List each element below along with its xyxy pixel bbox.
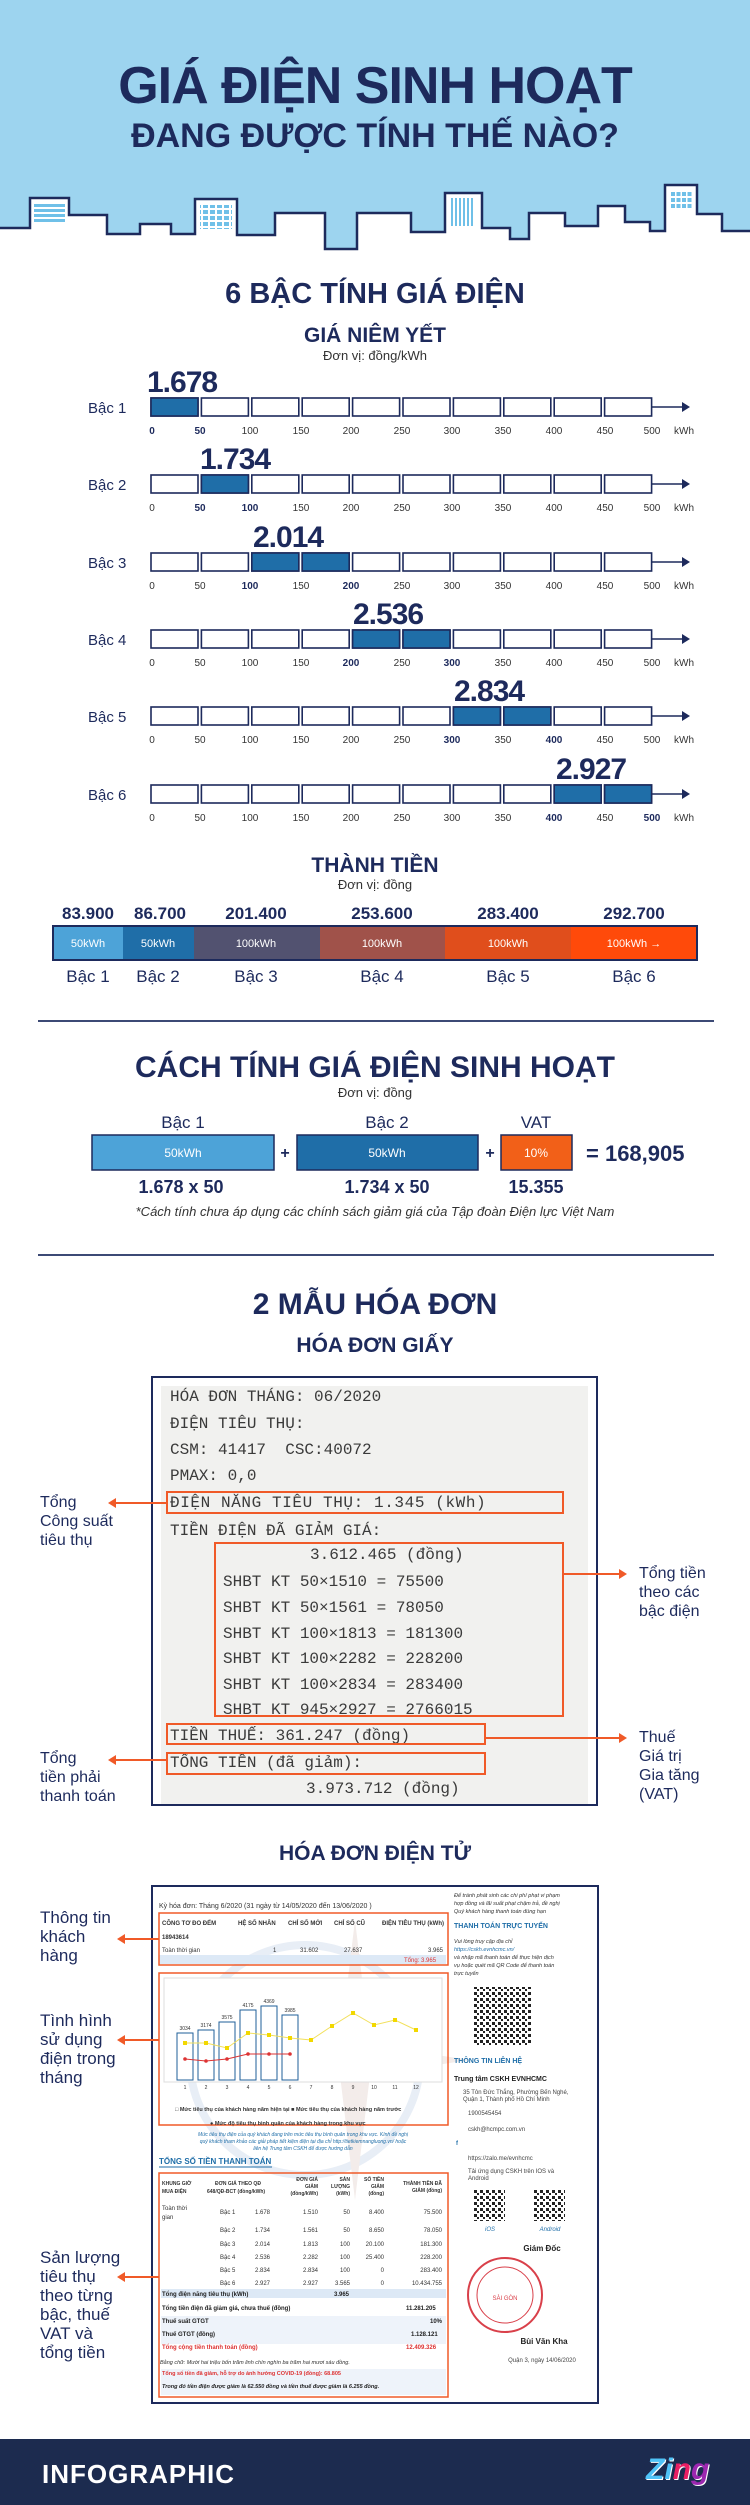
electronic bill: 2.536 — [255, 2255, 271, 2261]
customer info box — [159, 1919, 446, 1964]
calculation formula: + — [485, 1145, 495, 1162]
stacked cost bar: 83.900 — [62, 904, 114, 923]
calculation formula: = 168,905 — [586, 1141, 684, 1166]
electronic bill: 11.281.205 — [406, 2306, 436, 2312]
callout: thue VAT — [639, 1729, 699, 1803]
electronic bill: GIẢM (đồng) — [412, 2187, 442, 2194]
electronic bill: Bậc 3 — [220, 2242, 236, 2248]
electronic bill: 1.561 — [303, 2228, 319, 2234]
electronic bill: 8.650 — [369, 2228, 385, 2234]
electronic bill: Android — [539, 2227, 561, 2233]
stacked cost bar: 50kWh — [141, 938, 175, 950]
electronic bill: (kWh) — [336, 2191, 350, 2197]
row: bac 6 — [88, 753, 694, 824]
electronic bill: Giám Đốc — [523, 2244, 561, 2253]
electronic bill: 3.965 — [334, 2292, 350, 2298]
subheading: hoa don giay: HÓA ĐƠN GIẤY — [296, 1334, 454, 1357]
footnote: *Cách tính chưa áp dụng các chính sách giảm giá của Tập đoàn Điện lực Việt Nam — [136, 1204, 614, 1219]
electronic bill: 2.834 — [255, 2268, 271, 2274]
stacked cost bar: Bậc 5 — [486, 967, 530, 986]
right column contact: Để tránh phát sinh các chi phí phạt vi phạm — [454, 1892, 560, 1899]
electronic bill: SÀI GÒN — [492, 2295, 518, 2302]
paper bill: TIỀN THUẾ: 361.247 (đồng) — [170, 1727, 410, 1745]
electronic bill: Quận 1, Thành phố Hồ Chí Minh — [463, 2097, 550, 2103]
electronic bill: 12 — [413, 2085, 419, 2091]
electronic bill: Tổng điện năng tiêu thụ (kWh) — [162, 2291, 248, 2298]
zing logo: Zing — [646, 2453, 709, 2486]
stacked cost bar: 50kWh — [71, 938, 105, 950]
footer brand: INFOGRAPHIC — [42, 2459, 235, 2489]
electronic bill: Bậc 1 — [220, 2210, 236, 2216]
callout: tong tien thanh toan: Tổng — [40, 1750, 76, 1767]
unit note: Đơn vị: đồng/kWh — [323, 348, 427, 363]
callout: san luong: VAT và — [40, 2324, 93, 2343]
callout: thue VAT: Thuế — [639, 1729, 675, 1746]
row: bac 4: 200 — [343, 658, 360, 669]
row: bac 3: 2.014 — [253, 521, 324, 554]
row: bac 5: 400 — [546, 735, 563, 746]
electronic bill: 6 — [289, 2085, 292, 2091]
electronic bill: 181.300 — [420, 2242, 443, 2248]
customer info box: CHỈ SỐ MỚI — [288, 1919, 322, 1927]
unit note: Đơn vị: đồng — [338, 877, 412, 892]
electronic bill: 35 Tôn Đức Thắng, Phường Bến Nghé, — [463, 2089, 569, 2096]
unit note: Đơn vị: đồng — [338, 1085, 412, 1100]
customer info box: 27.637 — [344, 1948, 363, 1954]
electronic bill: 3034 — [179, 2026, 191, 2032]
row: bac 2 — [88, 443, 694, 514]
electronic bill: 100 — [340, 2255, 351, 2261]
calculation formula: Bậc 1 — [161, 1113, 205, 1132]
electronic bill: 5 — [268, 2085, 271, 2091]
electronic bill: 12.409.326 — [406, 2345, 437, 2351]
electronic bill: 10.434.755 — [412, 2281, 443, 2287]
callout: tong tien theo bac: theo các — [639, 1584, 699, 1601]
calculation formula: Bậc 2 — [365, 1113, 409, 1132]
paper bill: 3.973.712 (đồng) — [306, 1780, 460, 1798]
electronic bill: 8.400 — [369, 2210, 385, 2216]
row: bac 3 — [88, 521, 694, 592]
electronic bill: 10% — [430, 2319, 443, 2325]
paper bill: SHBT KT 100×2834 = 283400 — [223, 1676, 463, 1694]
electronic bill: 1.510 — [303, 2210, 319, 2216]
electronic bill: 4175 — [242, 2003, 254, 2009]
stacked cost bar: 86.700 — [134, 904, 186, 923]
calculation formula — [91, 1113, 684, 1197]
callout: thue VAT: Giá trị — [639, 1748, 682, 1765]
callout: san luong: bậc, thuế — [40, 2305, 110, 2324]
right column contact: Vui lòng truy cập địa chỉ — [454, 1938, 513, 1945]
highlight boxes on paper bill — [166, 1491, 564, 1775]
calculation formula: 10% — [524, 1146, 548, 1160]
callout: san luong: Sản lượng — [40, 2248, 120, 2267]
electronic bill: cskh@hcmpc.com.vn — [468, 2127, 525, 2133]
customer info box: CÔNG TƠ ĐO ĐẾM — [162, 1919, 216, 1927]
arrows for paper bill — [108, 1498, 627, 1765]
electronic bill: LƯỢNG — [331, 2184, 350, 2190]
electronic bill: 11 — [392, 2085, 398, 2091]
right column contact: https://cskh.evnhcmc.vn/ — [454, 1947, 515, 1953]
electronic bill: SỐ TIỀN — [364, 2176, 384, 2183]
callout: tong cong suat: tiêu thụ — [40, 1532, 92, 1549]
electronic bill: f — [456, 2141, 459, 2147]
electronic bill: Android — [468, 2176, 489, 2182]
paper bill: TIỀN ĐIỆN ĐÃ GIẢM GIÁ: — [170, 1522, 381, 1540]
callout: san luong: theo từng — [40, 2286, 113, 2305]
paper bill: PMAX: 0,0 — [170, 1467, 256, 1485]
row: bac 2: 50 — [194, 503, 206, 514]
callout: thong tin khach hang — [40, 1908, 111, 1965]
callout: tinh hinh su dung — [40, 2011, 116, 2087]
callout: tinh hinh su dung: tháng — [40, 2068, 83, 2087]
stacked cost bar: 100kWh — [362, 938, 402, 950]
row: bac 2: 100 — [242, 503, 259, 514]
right column contact — [454, 1892, 561, 1977]
electronic bill: Bằng chữ: Mười hai triệu bốn trăm linh chín nghìn ba trăm hai mươi sáu đồng. — [160, 2359, 350, 2366]
paper bill: ĐIỆN NĂNG TIÊU THỤ: 1.345 (kWh) — [170, 1494, 486, 1512]
row: bac 5: Bậc 5 — [88, 709, 126, 726]
customer info box: Toàn thời gian — [162, 1948, 200, 1954]
electronic bill: 283.400 — [420, 2268, 443, 2274]
electronic bill: 50 — [343, 2228, 351, 2234]
customer info box: ĐIỆN TIÊU THỤ (kWh) — [382, 1919, 444, 1927]
electronic bill: 0 — [381, 2281, 385, 2287]
stacked cost bar: 100kWh → — [607, 938, 661, 950]
electronic bill: 0 — [381, 2268, 385, 2274]
callout: tinh hinh su dung: sử dụng — [40, 2030, 102, 2049]
row: bac 5: 2.834 — [454, 675, 525, 708]
electronic bill: Mức tiêu thụ điện của quý khách đang trên mức tiêu thụ bình quân trong khu vực. Kính đề nghị — [198, 2131, 409, 2138]
paper bill: SHBT KT 50×1561 = 78050 — [223, 1599, 444, 1617]
callout: thue VAT: Gia tăng — [639, 1767, 699, 1784]
electronic bill: MUA ĐIỆN — [162, 2187, 187, 2195]
subtitle: ĐANG ĐƯỢC TÍNH THẾ NÀO? — [131, 117, 619, 155]
electronic bill: Trung tâm CSKH EVNHCMC — [454, 2076, 547, 2083]
electronic bill: Trong đó tiền điện được giảm là 62.550 đồng và tiền thuế được giảm là 6.255 đồng. — [162, 2383, 380, 2390]
electronic bill: SẢN — [339, 2176, 350, 2183]
callout: tong tien theo bac — [639, 1565, 706, 1620]
electronic bill: □ Mức tiêu thụ của khách hàng năm hiện tại ■ Mức tiêu thụ của khách hàng năm trước — [175, 2107, 401, 2113]
electronic bill: ĐƠN GIÁ — [296, 2176, 318, 2183]
customer info box: 3.965 — [428, 1948, 444, 1954]
customer info box: CHỈ SỐ CŨ — [334, 1920, 365, 1927]
electronic bill: 75.500 — [424, 2210, 443, 2216]
electronic bill: Tải ứng dụng CSKH trên IOS và — [468, 2169, 555, 2175]
customer info box: 18943614 — [162, 1935, 189, 1941]
row: bac 6: 500 — [644, 813, 661, 824]
electronic bill: Bậc 5 — [220, 2268, 236, 2274]
title: GIÁ ĐIỆN SINH HOẠT — [118, 57, 632, 115]
callout: tong cong suat: Tổng — [40, 1494, 76, 1511]
electronic bill: quý khách tham khảo các giải pháp tiết kiệm điện tại địa chỉ http://tietkiemnangluong.vn/ hoặc — [200, 2138, 407, 2145]
calculation formula: 15.355 — [508, 1177, 564, 1197]
electronic bill: 2.014 — [255, 2242, 271, 2248]
electronic bill: 2 — [205, 2085, 208, 2091]
stacked cost bar — [52, 904, 698, 986]
electronic bill: Bậc 4 — [220, 2255, 236, 2261]
electronic bill: Thuế GTGT (đồng) — [162, 2331, 215, 2338]
section heading: cach tinh: CÁCH TÍNH GIÁ ĐIỆN SINH HOẠT — [135, 1051, 615, 1084]
electronic bill: 3.565 — [335, 2281, 351, 2287]
electronic bill: 7 — [310, 2085, 313, 2091]
row: bac 4: 2.536 — [353, 598, 423, 631]
calculation formula: VAT — [521, 1113, 551, 1132]
electronic bill: 50 — [343, 2210, 351, 2216]
electronic bill: 8 — [331, 2085, 334, 2091]
electronic bill: 2.282 — [303, 2255, 319, 2261]
electronic bill: THÀNH TIỀN ĐÃ — [403, 2180, 442, 2187]
electronic bill: 100 — [340, 2242, 351, 2248]
paper bill: ĐIỆN TIÊU THỤ: — [170, 1415, 304, 1433]
electronic bill: 1.734 — [255, 2228, 271, 2234]
electronic bill: 1.678 — [255, 2210, 271, 2216]
electronic bill: https://zalo.me/evnhcmc — [468, 2156, 533, 2162]
section heading: 2 mau hoa don: 2 MẪU HÓA ĐƠN — [253, 1288, 497, 1321]
stacked cost bar: Bậc 2 — [136, 967, 180, 986]
subheading: hoa don dien tu: HÓA ĐƠN ĐIỆN TỬ — [279, 1842, 471, 1865]
callout: thong tin khach hang: Thông tin — [40, 1908, 111, 1927]
row: bac 6: Bậc 6 — [88, 787, 126, 804]
callout: tong cong suat — [40, 1494, 113, 1549]
electronic bill: 2.927 — [303, 2281, 319, 2287]
paper bill: TỔNG TIỀN (đã giảm): — [170, 1754, 362, 1772]
right column contact: vụ hoặc quét mã QR Code để thanh toán — [454, 1962, 554, 1969]
electronic bill: 1 — [184, 2085, 187, 2091]
calculation formula: 50kWh — [164, 1146, 202, 1160]
electronic bill: Toàn thời — [162, 2206, 187, 2212]
electronic bill: 3575 — [221, 2015, 233, 2021]
electronic bill: 4 — [247, 2085, 250, 2091]
electronic bill: Bùi Văn Kha — [520, 2337, 568, 2346]
electronic bill: GIẢM — [305, 2183, 318, 2190]
calculation formula: 1.734 x 50 — [344, 1177, 430, 1197]
callout: tong tien theo bac: Tổng tiền — [639, 1565, 706, 1582]
callout: san luong: tiêu thụ — [40, 2267, 96, 2286]
electronic bill: iOS — [485, 2227, 495, 2233]
right column contact: và nhập mã thanh toán để thực hiện dịch — [454, 1954, 554, 1961]
electronic bill: 228.200 — [420, 2255, 443, 2261]
electronic bill: 3985 — [284, 2008, 296, 2014]
right column contact: hợp đồng và lãi suất phạt chậm trả, đề nghị — [454, 1900, 561, 1907]
right column contact: Quý khách hàng thanh toán đúng hạn — [454, 1909, 546, 1915]
callout: san luong: tổng tiền — [40, 2343, 105, 2362]
electronic bill: Tổng số tiền đã giảm, hỗ trợ do ảnh hưởng COVID-19 (đồng): 68.805 — [162, 2370, 341, 2377]
customer info box: HỆ SỐ NHÂN — [238, 1919, 276, 1927]
row: bac 2: Bậc 2 — [88, 477, 126, 494]
stacked cost bar: 253.600 — [351, 904, 413, 923]
electronic bill: 25.400 — [366, 2255, 385, 2261]
row: bac 3: Bậc 3 — [88, 555, 126, 572]
footer — [0, 2439, 750, 2505]
row: bac 2: 1.734 — [200, 443, 271, 476]
row: bac 4: Bậc 4 — [88, 632, 126, 649]
electronic bill: 100 — [340, 2268, 351, 2274]
calculation formula: + — [280, 1145, 290, 1162]
electronic bill: Quận 3, ngày 14/06/2020 — [508, 2358, 577, 2364]
electronic bill: 648/QĐ-BCT (đồng/kWh) — [207, 2189, 265, 2195]
electronic bill: 3 — [226, 2085, 229, 2091]
electronic bill: Kỳ hóa đơn: Tháng 6/2020 (31 ngày từ 14/05/2020 đến 13/06/2020 ) — [159, 1901, 372, 1910]
stacked cost bar: 201.400 — [225, 904, 287, 923]
stacked cost bar: Bậc 1 — [66, 967, 110, 986]
callout: tong tien thanh toan: thanh toán — [40, 1788, 116, 1805]
electronic bill: THANH TOÁN TRỰC TUYẾN — [454, 1920, 548, 1930]
customer info box: 1 — [273, 1948, 277, 1954]
electronic bill: Bậc 6 — [220, 2281, 236, 2287]
row: bac 1: 0 — [149, 426, 155, 437]
paper bill — [151, 1376, 598, 1806]
electronic bill: 20.100 — [366, 2242, 385, 2248]
callout: tinh hinh su dung: Tình hình — [40, 2011, 112, 2030]
row: bac 3: 100 — [242, 581, 259, 592]
callout: tong cong suat: Công suất — [40, 1513, 113, 1530]
callout: tong tien theo bac: bậc điện — [639, 1603, 700, 1620]
row: bac 4: 300 — [444, 658, 461, 669]
usage chart — [159, 1973, 448, 2125]
electronic bill: 9 — [352, 2085, 355, 2091]
electronic bill: Bậc 2 — [220, 2228, 236, 2234]
paper bill: CSM: 41417 CSC:40072 — [170, 1441, 372, 1459]
row: bac 3: 200 — [343, 581, 360, 592]
subheading: gia niem yet: GIÁ NIÊM YẾT — [304, 324, 446, 347]
customer info box: Tổng: 3.965 — [404, 1957, 437, 1964]
paper bill: SHBT KT 100×2282 = 228200 — [223, 1650, 463, 1668]
stacked cost bar: Bậc 4 — [360, 967, 404, 986]
electronic bill: ĐƠN GIÁ THEO QĐ — [215, 2180, 261, 2187]
callout: tong tien thanh toan — [40, 1750, 116, 1805]
row: bac 1: 1.678 — [147, 366, 217, 399]
electronic bill: 1.813 — [303, 2242, 319, 2248]
electronic bill: 3174 — [200, 2023, 212, 2029]
callout: tinh hinh su dung: điện trong — [40, 2049, 116, 2068]
right column contact: trực tuyến — [454, 1970, 479, 1977]
electronic bill: GIẢM — [371, 2183, 384, 2190]
electronic bill: (đồng) — [368, 2191, 384, 2197]
paper bill: SHBT KT 100×1813 = 181300 — [223, 1625, 463, 1643]
row: bac 5: 300 — [444, 735, 461, 746]
callout: san luong — [40, 2248, 120, 2362]
section heading: 6 bac: 6 BẬC TÍNH GIÁ ĐIỆN — [225, 278, 525, 310]
stacked cost bar: 292.700 — [603, 904, 665, 923]
electronic bill: 10 — [371, 2085, 377, 2091]
row: bac 5 — [88, 675, 694, 746]
stacked cost bar: 100kWh — [236, 938, 276, 950]
payment table — [159, 2173, 448, 2397]
callout: thong tin khach hang: khách — [40, 1927, 85, 1946]
calculation formula: 1.678 x 50 — [138, 1177, 224, 1197]
row: bac 1: Bậc 1 — [88, 400, 126, 417]
paper bill: 3.612.465 (đồng) — [310, 1546, 464, 1564]
arrows for e-bill — [117, 1934, 158, 2282]
electronic bill: gian — [162, 2215, 173, 2221]
row: bac 1 — [88, 366, 694, 437]
electronic bill: Thuế suất GTGT — [162, 2318, 209, 2325]
electronic bill: Tổng cộng tiền thanh toán (đồng) — [162, 2344, 258, 2351]
electronic bill — [151, 1885, 599, 2404]
stacked cost bar: Bậc 6 — [612, 967, 656, 986]
paper bill: HÓA ĐƠN THÁNG: 06/2020 — [170, 1388, 381, 1406]
subheading: thanh tien: THÀNH TIỀN — [311, 854, 439, 877]
electronic bill: KHUNG GIỜ — [162, 2179, 192, 2187]
tier chart — [88, 366, 694, 824]
callout: thong tin khach hang: hàng — [40, 1946, 78, 1965]
callout: thue VAT: (VAT) — [639, 1786, 678, 1803]
electronic bill: Tổng tiền điện đã giảm giá, chưa thuế (đồng) — [162, 2305, 290, 2312]
row: bac 6: 2.927 — [556, 753, 626, 786]
electronic bill: TỔNG SỐ TIỀN THANH TOÁN — [159, 2156, 272, 2166]
row: bac 4 — [88, 598, 694, 669]
electronic bill: 4369 — [263, 1999, 275, 2005]
paper bill: SHBT KT 50×1510 = 75500 — [223, 1573, 444, 1591]
electronic bill: liên hệ Trung tâm CSKH để được hướng dẫn — [253, 2145, 353, 2152]
header sky with skyline — [0, 0, 750, 250]
electronic bill: 2.834 — [303, 2268, 319, 2274]
electronic bill: 2.927 — [255, 2281, 271, 2287]
stacked cost bar: 283.400 — [477, 904, 539, 923]
electronic bill: THÔNG TIN LIÊN HỆ — [454, 2056, 522, 2065]
electronic bill: 1900545454 — [468, 2111, 502, 2117]
paper bill: SHBT KT 945×2927 = 2766015 — [223, 1701, 473, 1719]
electronic bill: (đồng/kWh) — [290, 2191, 318, 2197]
stacked cost bar: Bậc 3 — [234, 967, 278, 986]
electronic bill: 1.128.121 — [411, 2332, 438, 2338]
callout: tong tien thanh toan: tiền phải — [40, 1769, 100, 1786]
row: bac 6: 400 — [546, 813, 563, 824]
row: bac 1: 50 — [194, 426, 206, 437]
calculation formula: 50kWh — [368, 1146, 406, 1160]
customer info box: 31.602 — [300, 1948, 319, 1954]
electronic bill: 78.050 — [424, 2228, 443, 2234]
stacked cost bar: 100kWh — [488, 938, 528, 950]
electronic bill: ● Mức độ tiêu thụ bình quân của khách hàng trong khu vực — [210, 2121, 366, 2127]
